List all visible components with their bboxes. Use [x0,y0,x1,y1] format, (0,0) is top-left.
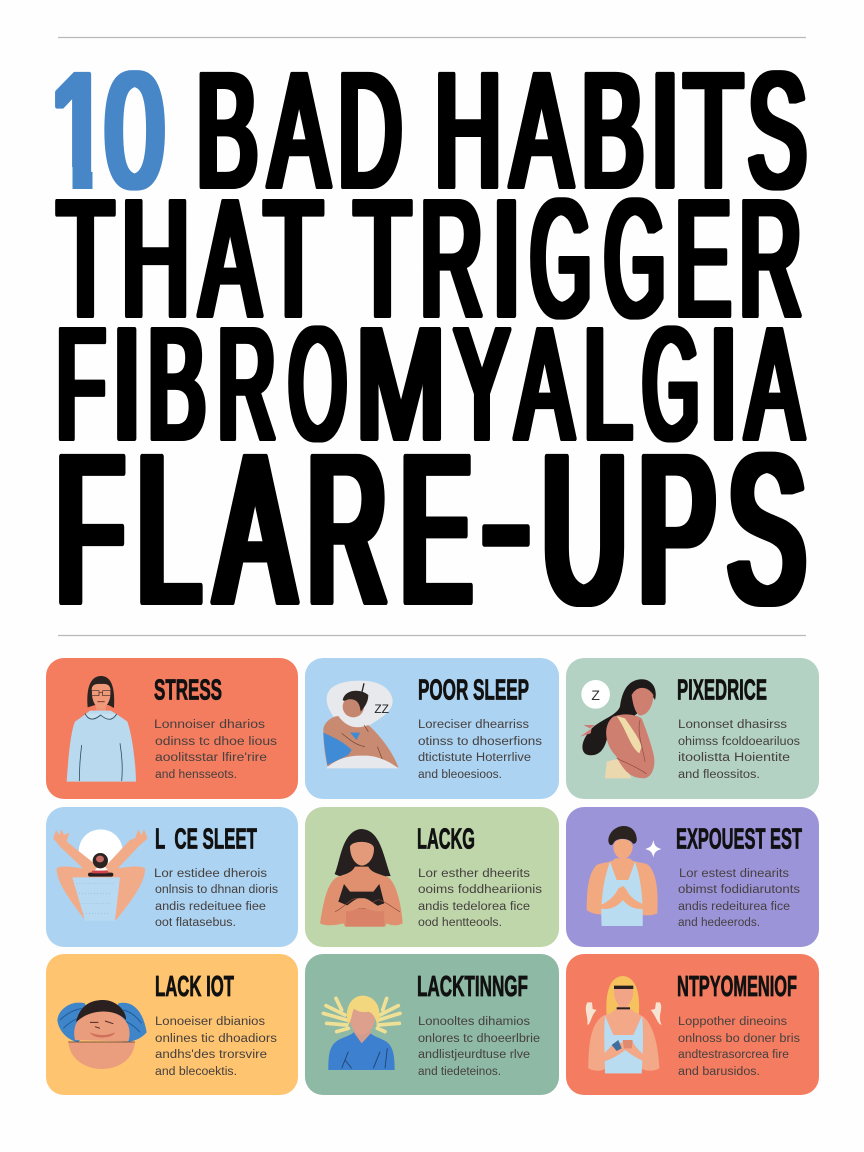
text block: poor sleep: dtictistute Hoterrlive [418,752,531,764]
text block: ntpyomeniof: and barusidos. [678,1066,760,1078]
title: F [57,411,123,647]
text block: ntpyomeniof: onlnoss bo doner bris [678,1033,800,1045]
text block: ntpyomeniof: andtestrasorcrea fire [678,1049,789,1061]
text block: lack iot [155,1016,277,1078]
text block: lackg [418,868,542,929]
text block: lice sleet: onlnsis to dhnan dioris [155,884,278,896]
title: G [643,296,699,472]
title: P [639,411,716,647]
text block: lackg: ooims foddheariionis [418,884,542,896]
title: F [57,296,105,472]
title: A [512,38,572,222]
title: A [200,166,260,352]
text block: expouest est: and hedeerods. [678,917,760,929]
text block: lackg: Lor esther dheerits [418,868,530,880]
title: E [676,166,731,352]
title: G [604,166,665,352]
text block: stress [154,719,277,781]
text block: lack iot: onlines tic dhoadiors [155,1033,277,1045]
title: R [308,411,386,647]
title: U [542,411,626,647]
text block: expouest est: Lor estest dinearits [679,868,789,880]
title: S [748,38,806,222]
text block: stress: odinss tc dhoe lious [155,736,277,748]
title: M [356,296,445,472]
title: H [122,166,190,352]
title: A [270,38,329,222]
title: B [581,38,644,222]
text block: lice sleet [154,868,278,929]
panel: lack iot [46,954,298,1095]
title: I [650,38,680,222]
title: I [492,166,522,352]
title: T [264,166,320,352]
title: - [483,400,529,636]
icon: woman with dark hair [320,829,403,927]
text block: lice sleet: oot flatasebus. [155,917,236,929]
title: D [338,38,402,222]
text block: pixedrice [678,719,800,781]
text block: pixedrice: and fleossitos. [678,769,760,781]
text block: stress: and hensseots. [155,769,237,781]
title: T [58,166,114,352]
title: E [401,411,471,647]
panel: expouest est [566,807,819,947]
title: A [746,296,803,472]
title: T [354,166,410,352]
icon: sleeping person: ZZ [374,702,389,716]
title: B [196,38,258,222]
text block: ntpyomeniof [678,1016,800,1078]
text block: lackg: ood hentteools. [418,917,502,929]
heading: lacktinngf: LACKTINNGF [417,971,528,1003]
title [44,38,806,647]
title: B [148,296,206,472]
text block: lice sleet: andis redeituee fiee [155,901,266,913]
icon: blonde woman with hands clasped [586,976,662,1073]
text block: lacktinngf: Lonooltes dihamios [418,1016,530,1028]
icon: blond person with bursts [323,996,400,1070]
text block: expouest est: andis redeiturea fice [678,901,790,913]
heading: lice sleet: L CE SLEET [155,824,257,856]
icon: man in tank top with sparkle [587,826,661,926]
text block: lice sleet: Lor estidee dherois [154,868,267,880]
text block: pixedrice: ohimss fcoldoeariluos [678,736,800,748]
panel: poor sleep [305,658,559,799]
title: O [289,296,346,472]
text block: lackg: andis tedelorea fice [418,901,530,913]
panel: ntpyomeniof [566,954,819,1095]
text block: poor sleep: otinss to dhoserfions [418,736,542,748]
text block: lacktinngf: and tiedeteinos. [418,1066,501,1078]
text block: pixedrice: itoolistta Hoientite [678,752,790,764]
panel: pixedrice [566,658,819,799]
title: 1 [49,38,110,222]
panel: stress [46,658,298,799]
text block: pixedrice: Lononset dhasirss [678,719,787,731]
text block: expouest est [678,868,800,929]
title: 0 [105,38,164,222]
title: I [112,296,142,472]
text block: lack iot: Lonoeiser dbianios [155,1016,265,1028]
icon: face with blue hair over a bowl [57,1000,147,1069]
text block: expouest est: obimst fodidiarutonts [678,884,800,896]
icon: person with raised arms [53,829,148,921]
heading: stress: STRESS [154,674,222,706]
icon: woman with long hair and z bubble [580,679,656,778]
heading: lackg: LACKG [417,824,475,856]
heading: pixedrice: PIXEDRICE [677,674,767,706]
title: H [435,38,501,222]
text block: ntpyomeniof: Loppother dineoins [678,1016,787,1028]
title: T [684,38,742,222]
title: L [138,411,200,647]
panel: lice sleet [46,807,298,947]
text block: lack iot: andhs'des trorsvire [155,1049,267,1061]
title: G [530,166,591,352]
title: A [217,411,293,647]
text block: stress: aoolitsstar lfire'rire [155,752,267,764]
title: I [709,296,738,472]
title: R [739,166,802,352]
icon: sleeping person [323,681,398,768]
text block: lacktinngf: onlores tc dhoeerlbrie [418,1033,540,1045]
heading: lack iot: LACK IOT [155,971,234,1003]
text block: poor sleep [418,719,542,781]
title: Y [455,296,509,472]
title: R [218,296,275,472]
panel: lackg [305,807,559,947]
icon: woman with long hair and z bubble: Z [591,687,600,703]
text block: poor sleep: and bleoesioos. [418,769,502,781]
text block: lack iot: and blecoektis. [155,1066,237,1078]
text block: poor sleep: Loreciser dhearriss [418,719,529,731]
title: A [516,296,573,472]
text block: lacktinngf [418,1016,540,1078]
panel: lacktinngf [305,954,559,1095]
icon: woman with glasses [67,676,136,782]
title: R [420,166,482,352]
heading: poor sleep: POOR SLEEP [418,674,529,706]
title: L [584,296,632,472]
text block: stress: Lonnoiser dharios [154,719,265,731]
text block: lacktinngf: andlistjeurdtuse rlve [418,1049,530,1061]
